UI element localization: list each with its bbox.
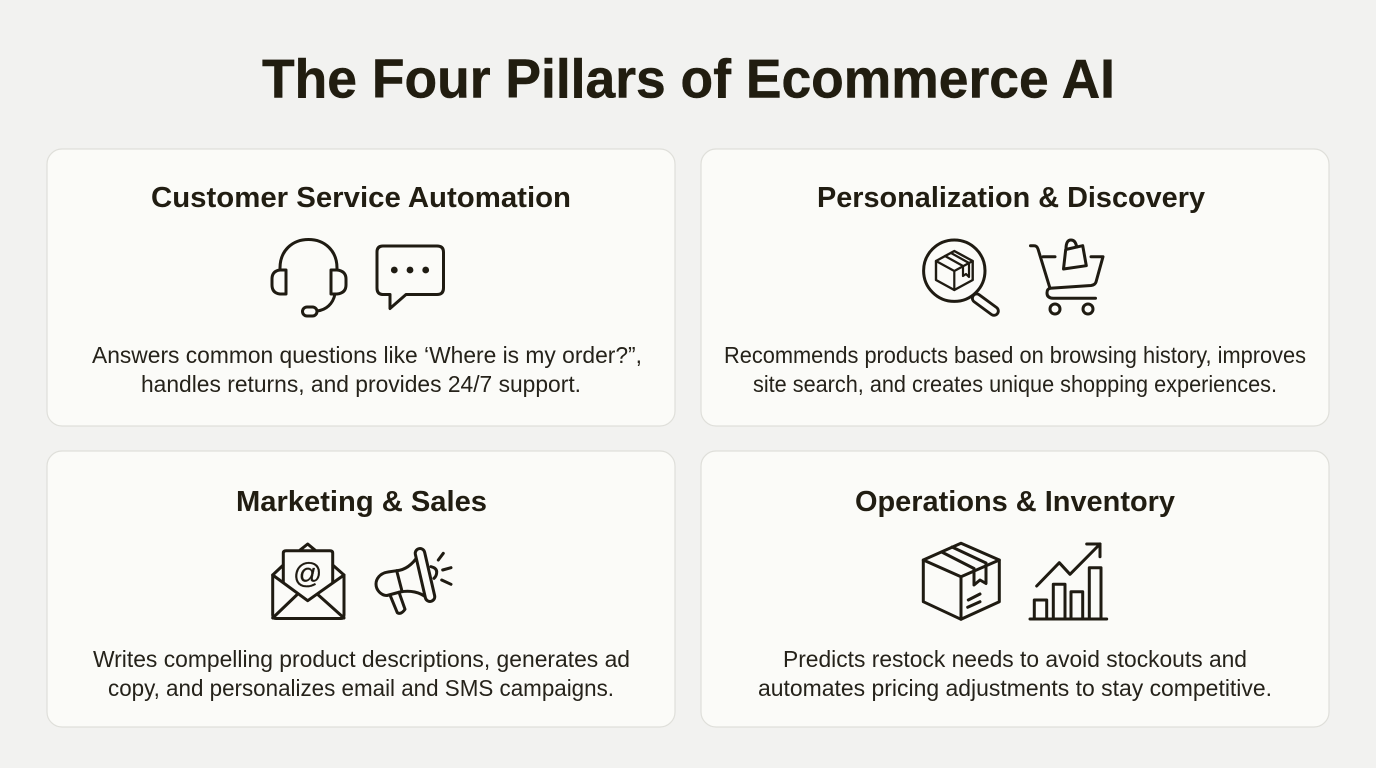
- panel: marketing and sales: [47, 451, 675, 727]
- icon: magnifier with box: [924, 240, 994, 311]
- title: The Four Pillars of Ecommerce AI: [262, 48, 1115, 110]
- text: marketing description: copy, and personalizes email and SMS campaigns.: [108, 675, 614, 701]
- text: customer service description: handles returns, and provides 24/7 support.: [141, 371, 581, 397]
- heading: personalization and discovery: Personalization & Discovery: [817, 182, 1205, 214]
- text: operations description: [758, 646, 1272, 701]
- panel: customer service automation: [47, 149, 675, 426]
- icon: shopping cart with bag: [1030, 240, 1103, 314]
- text: personalization description: Recommends products based on browsing history, improves: [724, 342, 1306, 368]
- text: personalization description: site search, and creates unique shopping experiences.: [753, 371, 1277, 397]
- heading: marketing and sales: Marketing & Sales: [236, 486, 487, 518]
- icon: envelope with at sign: @: [293, 558, 322, 590]
- icon: growth bar chart: [1030, 544, 1107, 619]
- text: operations description: Predicts restock needs to avoid stockouts and: [783, 646, 1247, 672]
- panel: operations and inventory: [701, 451, 1329, 727]
- text: personalization description: [724, 342, 1306, 397]
- icon: envelope with at sign: [273, 544, 344, 618]
- icon: package box: [923, 543, 999, 619]
- text: customer service description: Answers common questions like ‘Where is my order?”,: [92, 342, 642, 368]
- heading: customer service automation: Customer Service Automation: [151, 182, 571, 214]
- text: marketing description: Writes compelling product descriptions, generates ad: [93, 646, 630, 672]
- text: operations description: automates pricing adjustments to stay competitive.: [758, 675, 1272, 701]
- icon: megaphone: [376, 553, 451, 613]
- heading: operations and inventory: Operations & Inventory: [855, 486, 1175, 518]
- icon: headset: [272, 240, 346, 316]
- icon: speech bubble: [377, 246, 444, 308]
- text: customer service description: [92, 342, 642, 397]
- text: marketing description: [93, 646, 630, 701]
- panel: personalization and discovery: [701, 149, 1329, 426]
